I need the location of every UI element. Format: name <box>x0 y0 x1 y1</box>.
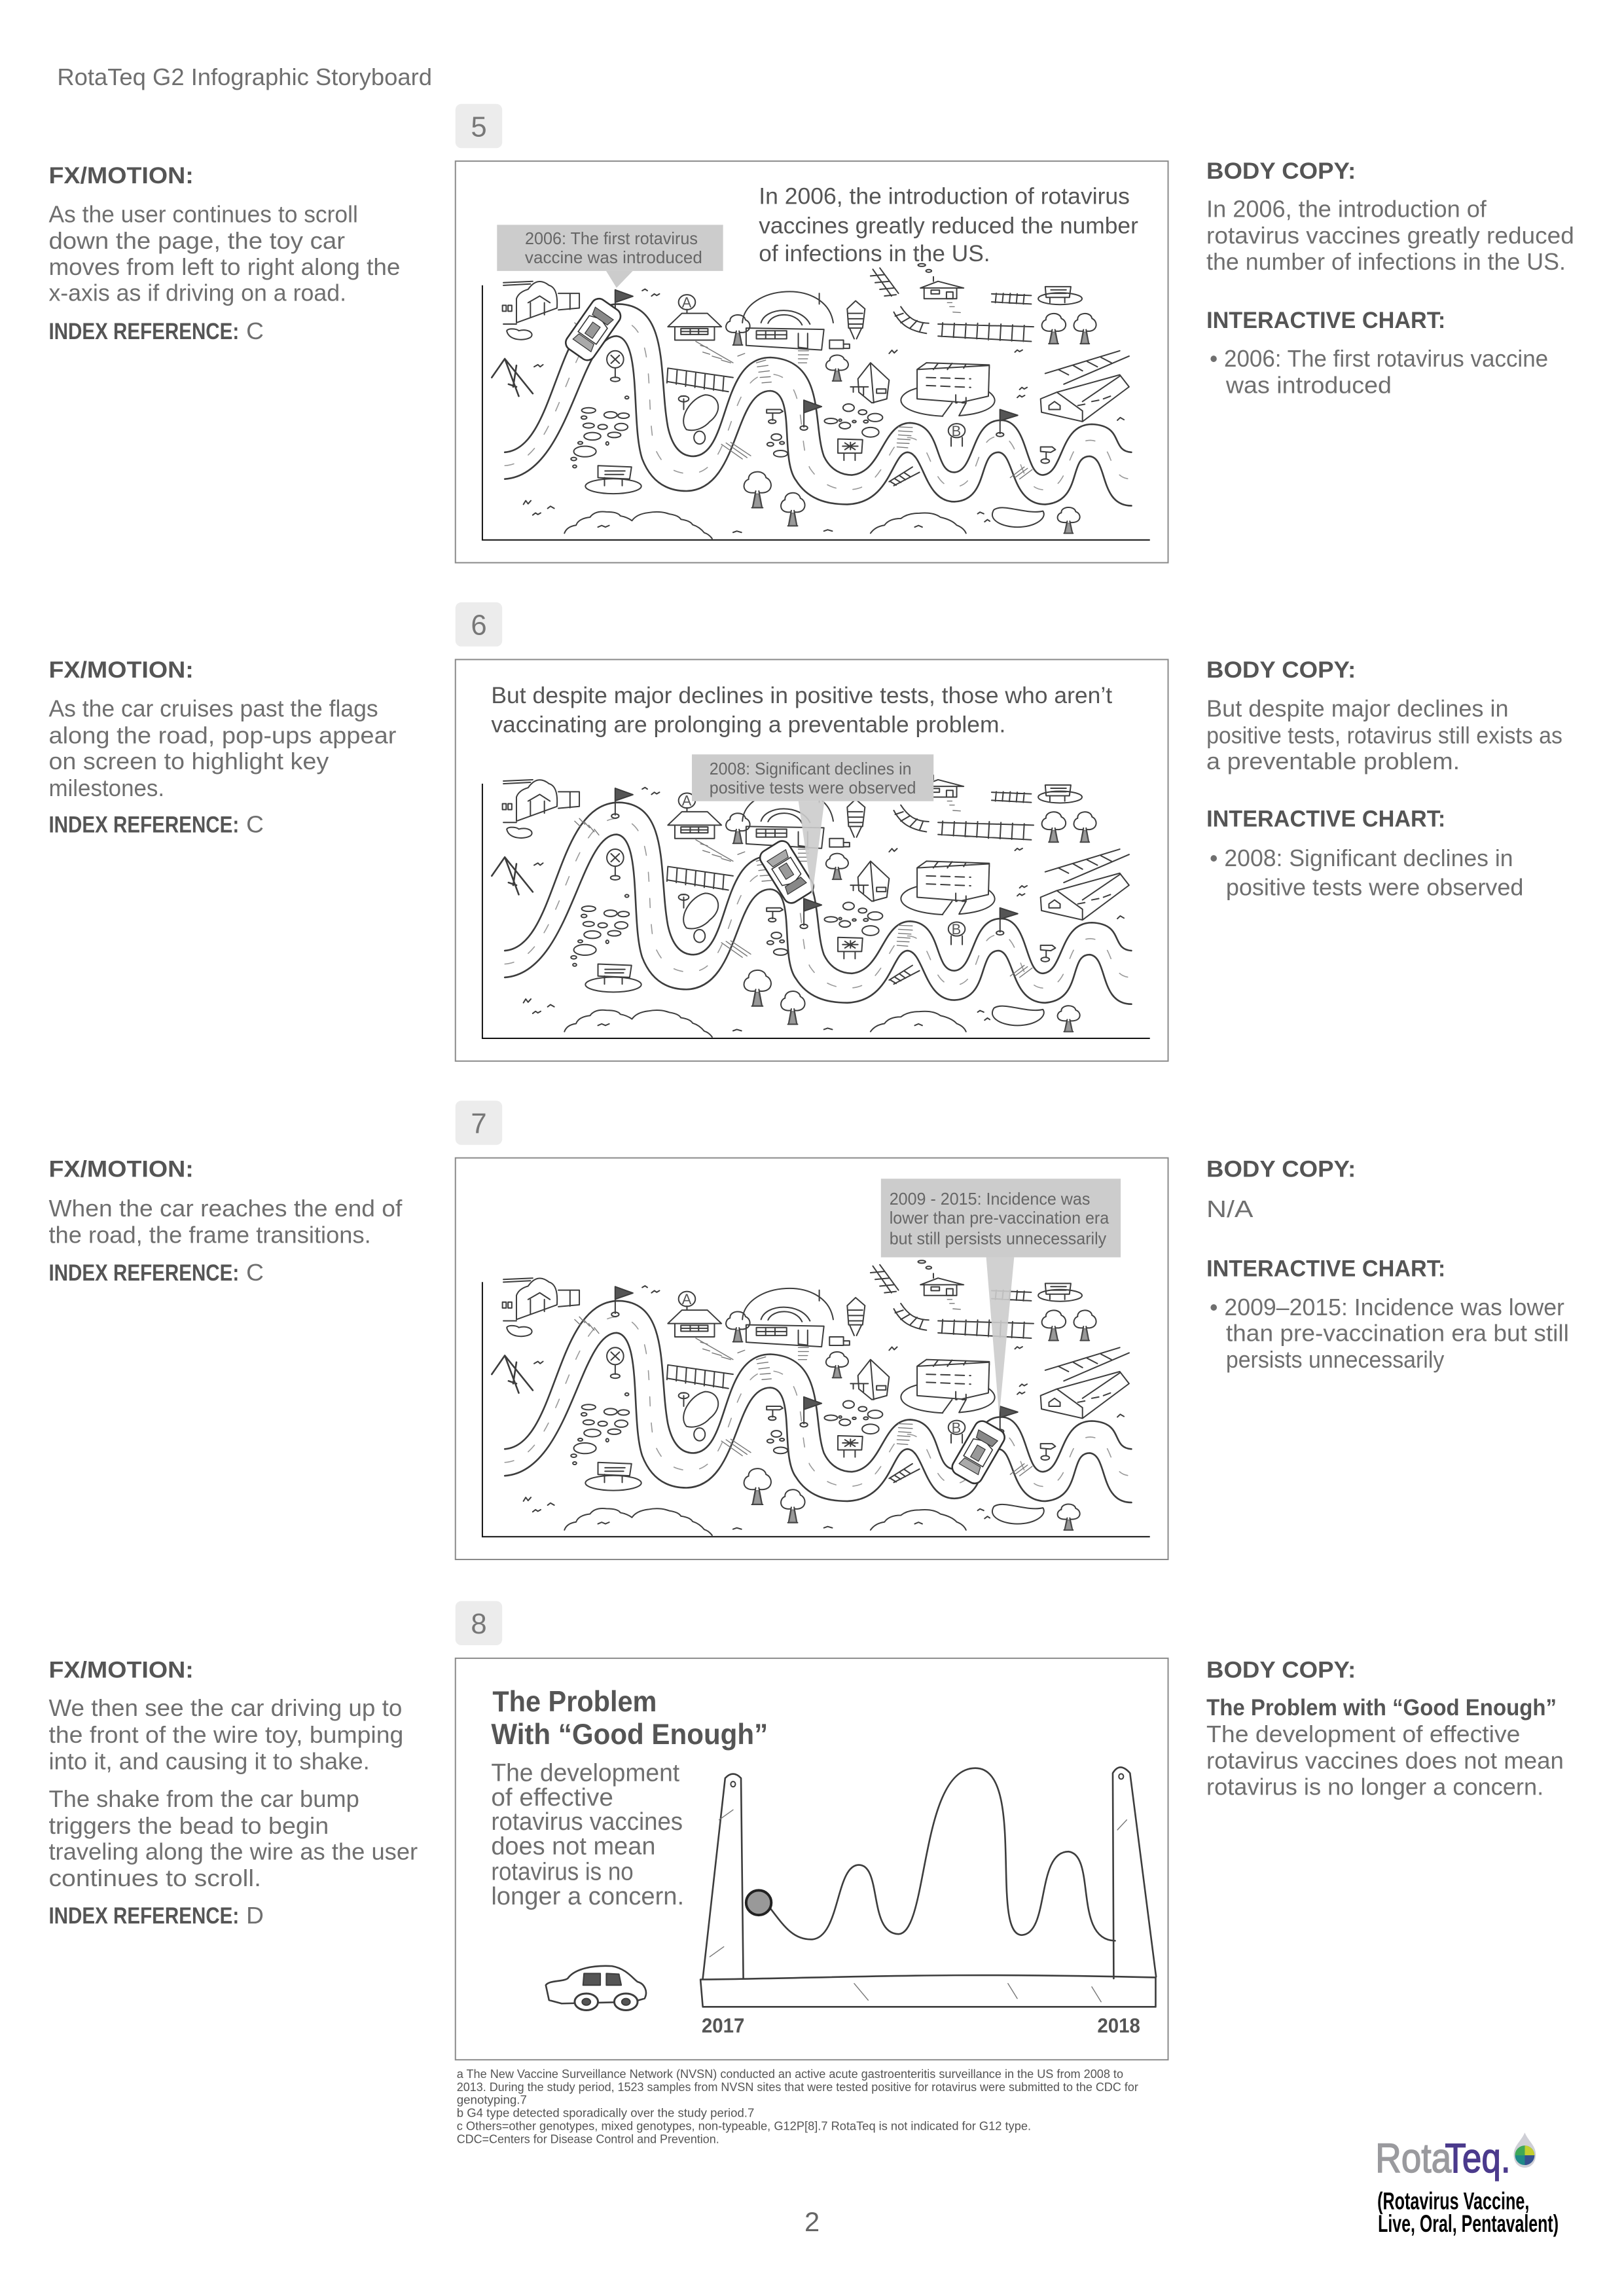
section 8 number tab <box>456 1601 502 1645</box>
panel: section 8 chart <box>456 1658 1168 2060</box>
road map illustration <box>492 762 1131 1037</box>
panel text block: rotavirus is no <box>491 1857 634 1885</box>
chart axes <box>482 1282 1150 1537</box>
right column: section 7 body copy: persists unnecessarily <box>1226 1347 1444 1373</box>
left column: section 6 FX/motion: milestones. <box>48 775 164 801</box>
panel headline: In 2006, the introduction of rotavirus <box>759 185 1130 210</box>
section 7 number tab: 7 <box>471 1108 487 1140</box>
left column: section 5 FX/motion: C <box>246 318 264 344</box>
left column: section 6 FX/motion: C <box>246 811 264 837</box>
left column: section 8 FX/motion: The shake from the car bump <box>48 1786 359 1812</box>
panel: section 7 chart <box>456 1158 1168 1559</box>
left column: section 8 FX/motion: traveling along the wire as the user <box>48 1839 418 1865</box>
right column: section 5 body copy: rotavirus vaccines greatly reduced <box>1206 223 1574 249</box>
road map illustration <box>492 1260 1131 1535</box>
footnotes: genotyping.7 <box>457 2093 527 2107</box>
section 8 number tab: 8 <box>471 1608 487 1640</box>
left column: section 5 FX/motion <box>48 164 400 344</box>
callout: 2006: vaccine was introduced <box>525 249 702 267</box>
right column: section 8 body copy: rotavirus vaccines does not mean <box>1206 1748 1564 1774</box>
left column: section 8 FX/motion: into it, and causing it to shake. <box>48 1749 370 1775</box>
right column: section 5 body copy: In 2006, the introduction of <box>1206 196 1487 222</box>
right column: section 5 body copy: INTERACTIVE CHART: <box>1206 308 1445 333</box>
panel text block: of effective <box>491 1783 613 1811</box>
toy car <box>563 296 624 363</box>
left column: section 8 FX/motion: the front of the wire toy, bumping <box>48 1722 403 1748</box>
left column: section 7 FX/motion: the road, the frame transitions. <box>48 1222 371 1248</box>
right column: section 8 body copy <box>1206 1658 1564 1800</box>
panel heading <box>491 1686 768 1751</box>
panel text block <box>491 1758 684 1910</box>
wire toy year labels: 2017 <box>702 2014 744 2037</box>
right column: section 8 body copy: The development of effective <box>1206 1721 1520 1747</box>
right column: section 6 body copy: • 2008: Significant declines in <box>1210 845 1513 871</box>
callout: 2009-2015 <box>881 1178 1121 1417</box>
map sign letters <box>682 1291 961 1436</box>
right column: section 6 body copy: positive tests were observed <box>1226 875 1523 901</box>
map sign letters: B <box>952 921 961 938</box>
left column: section 8 FX/motion: D <box>246 1903 264 1929</box>
left column: section 6 FX/motion: FX/MOTION: <box>48 658 194 683</box>
panel headline: But despite major declines in positive tests, those who aren’t <box>491 683 1113 708</box>
map sign letters <box>682 294 961 439</box>
page number: 2 <box>804 2206 820 2237</box>
right column: section 7 body copy <box>1206 1157 1569 1373</box>
right column: section 7 body copy: • 2009–2015: Incidence was lower <box>1210 1294 1564 1321</box>
left column: section 5 FX/motion: As the user continues to scroll <box>48 201 358 227</box>
panel headline <box>491 683 1113 738</box>
wire toy year labels <box>702 2014 1140 2037</box>
panel text block: longer a concern. <box>491 1882 684 1910</box>
left column: section 5 FX/motion: moves from left to right along the <box>48 254 400 280</box>
footnotes <box>457 2067 1138 2145</box>
left column: section 8 FX/motion: FX/MOTION: <box>48 1658 194 1683</box>
left column: section 8 FX/motion: continues to scroll. <box>48 1865 261 1891</box>
panel headline <box>759 185 1138 266</box>
callout: 2006: 2006: The first rotavirus <box>525 230 698 248</box>
left column: section 6 FX/motion: INDEX REFERENCE: <box>48 812 239 837</box>
right column: section 5 body copy: • 2006: The first rotavirus vaccine <box>1210 346 1548 372</box>
map sign letters <box>682 793 961 938</box>
right column: section 5 body copy: BODY COPY: <box>1206 159 1356 184</box>
wire toy illustration <box>700 1767 1156 2007</box>
panel text block: does not mean <box>491 1832 655 1860</box>
left column: section 5 FX/motion: down the page, the toy car <box>48 228 345 254</box>
section 5 number tab <box>456 104 502 148</box>
right column: section 8 body copy: BODY COPY: <box>1206 1658 1356 1683</box>
panel: section 6 chart <box>456 659 1168 1061</box>
right column: section 5 body copy: was introduced <box>1225 372 1392 398</box>
left column: section 8 FX/motion: We then see the car driving up to <box>48 1695 402 1721</box>
map sign letters: A <box>682 793 692 809</box>
logo: RotaTeq: Teq. <box>1445 2135 1511 2181</box>
left column: section 7 FX/motion <box>48 1157 402 1286</box>
left column: section 8 FX/motion: triggers the bead to begin <box>48 1813 329 1839</box>
right column: section 6 body copy: positive tests, rotavirus still exists as <box>1206 722 1562 748</box>
section 6 number tab <box>456 602 502 647</box>
right column: section 8 body copy: The Problem with “Good Enough” <box>1206 1696 1557 1721</box>
panel headline: vaccinating are prolonging a preventable problem. <box>491 713 1005 738</box>
callout: 2008: positive tests were observed <box>710 779 916 797</box>
section 6 number tab: 6 <box>471 610 487 642</box>
right column: section 7 body copy: than pre-vaccination era but still <box>1226 1321 1569 1347</box>
left column: section 7 FX/motion: When the car reaches the end of <box>48 1195 402 1222</box>
logo: RotaTeq: Rota <box>1375 2135 1452 2181</box>
callout: 2009-2015: lower than pre-vaccination era <box>890 1209 1110 1228</box>
section 7 number tab <box>456 1101 502 1145</box>
callout: 2009-2015: but still persists unnecessarily <box>890 1230 1106 1248</box>
chart axes <box>482 285 1150 540</box>
left column: section 6 FX/motion: on screen to highlight key <box>48 748 329 774</box>
left column: section 6 FX/motion: along the road, pop-ups appear <box>48 722 397 748</box>
right column: section 6 body copy: a preventable problem. <box>1206 748 1460 774</box>
left column: section 6 FX/motion <box>48 658 397 837</box>
left column: section 8 FX/motion: INDEX REFERENCE: <box>48 1904 239 1929</box>
map sign letters: B <box>952 1419 961 1436</box>
panel heading: With “Good Enough” <box>491 1719 768 1751</box>
left column: section 7 FX/motion: FX/MOTION: <box>48 1157 194 1182</box>
panel heading: The Problem <box>492 1686 657 1718</box>
road map illustration <box>492 264 1131 539</box>
icon: droplet <box>1514 2132 1536 2168</box>
panel text block: rotavirus vaccines <box>491 1808 683 1835</box>
right column: section 8 body copy: rotavirus is no longer a concern. <box>1206 1774 1543 1800</box>
right column: section 7 body copy: N/A <box>1206 1196 1254 1222</box>
side-view car <box>546 1966 646 2010</box>
panel text block: The development <box>491 1758 680 1786</box>
logo: RotaTeq <box>1375 2132 1559 2237</box>
panel headline: vaccines greatly reduced the number <box>759 213 1138 238</box>
right column: section 6 body copy: INTERACTIVE CHART: <box>1206 807 1445 831</box>
right column: section 7 body copy: BODY COPY: <box>1206 1157 1356 1182</box>
map sign letters: B <box>952 423 961 439</box>
left column: section 5 FX/motion: FX/MOTION: <box>48 164 194 189</box>
toy car <box>949 1418 1007 1486</box>
left column: section 8 FX/motion <box>48 1658 418 1929</box>
map sign letters: A <box>682 294 692 310</box>
left column: section 7 FX/motion: INDEX REFERENCE: <box>48 1261 239 1286</box>
map sign letters: A <box>682 1291 692 1307</box>
toy car <box>757 838 816 906</box>
footnotes: b G4 type detected sporadically over the study period.7 <box>457 2106 754 2120</box>
callout: 2009-2015: 2009 - 2015: Incidence was <box>890 1190 1090 1209</box>
wire toy year labels: 2018 <box>1097 2014 1140 2037</box>
left column: section 5 FX/motion: INDEX REFERENCE: <box>48 319 239 344</box>
generic name: (Rotavirus Vaccine, <box>1377 2188 1529 2215</box>
callout: 2008 <box>692 754 933 897</box>
right column: section 5 body copy: the number of infections in the US. <box>1206 249 1566 275</box>
right column: section 6 body copy: BODY COPY: <box>1206 658 1356 683</box>
title: RotaTeq G2 Infographic Storyboard <box>57 64 432 90</box>
footnotes: a The New Vaccine Surveillance Network (NVSN) conducted an active acute gastroenteritis surveillance in the US from 2008 to <box>457 2067 1123 2081</box>
left column: section 5 FX/motion: x-axis as if driving on a road. <box>48 280 346 306</box>
left column: section 7 FX/motion: C <box>246 1260 264 1286</box>
section 5 number tab: 5 <box>471 111 487 143</box>
callout: 2008: 2008: Significant declines in <box>710 760 911 778</box>
panel: section 5 chart <box>456 161 1168 563</box>
footnotes: 2013. During the study period, 1523 samples from NVSN sites that were tested positive for rotavirus were submitted to the CDC for <box>457 2080 1138 2094</box>
right column: section 6 body copy <box>1206 658 1562 901</box>
chart axes <box>482 784 1150 1038</box>
right column: section 5 body copy <box>1206 159 1574 398</box>
footnotes: CDC=Centers for Disease Control and Prevention. <box>457 2132 719 2145</box>
right column: section 6 body copy: But despite major declines in <box>1206 696 1509 722</box>
callout: 2006 <box>497 225 723 288</box>
right column: section 7 body copy: INTERACTIVE CHART: <box>1206 1256 1445 1281</box>
left column: section 6 FX/motion: As the car cruises past the flags <box>48 696 378 722</box>
footnotes: c Others=other genotypes, mixed genotypes, non-typeable, G12P[8].7 RotaTeq is not indicated for G12 type. <box>457 2119 1031 2132</box>
panel headline: of infections in the US. <box>759 242 990 266</box>
